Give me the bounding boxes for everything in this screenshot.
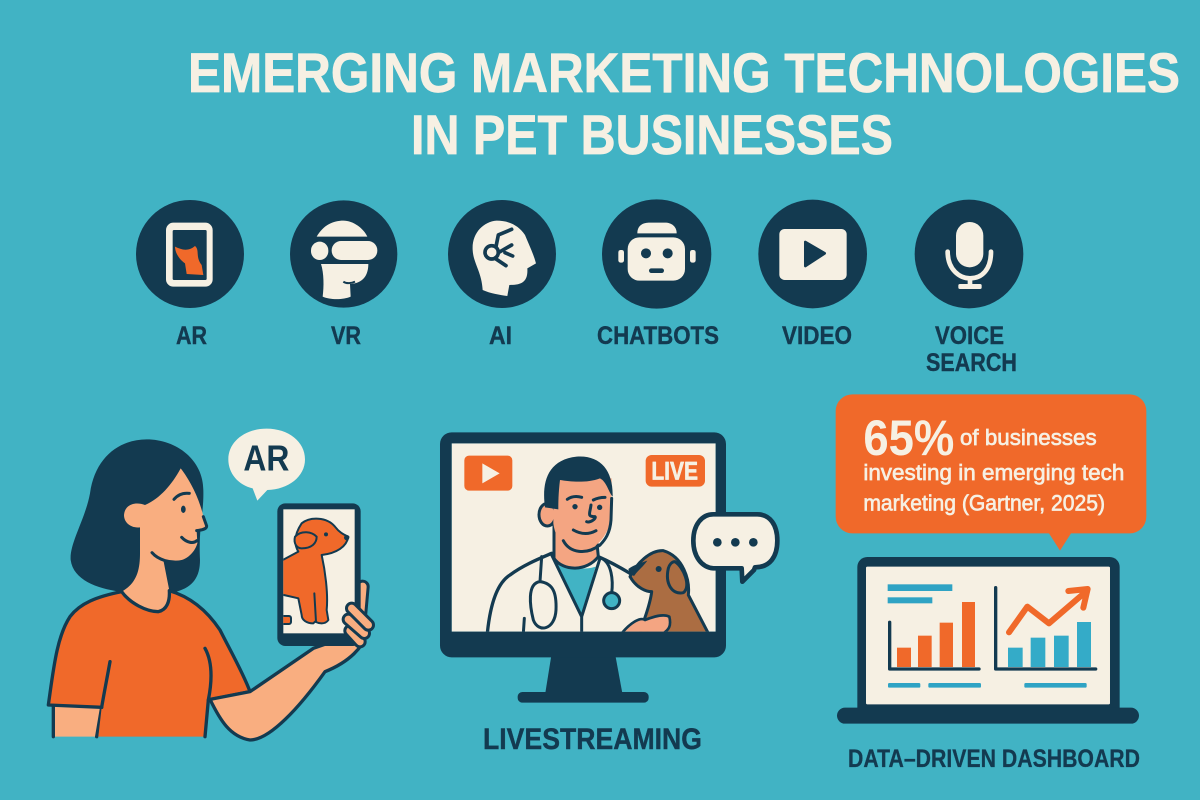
stethoscope chest piece	[604, 593, 620, 609]
woman's face and neck	[122, 468, 207, 612]
callout text: marketing (Gartner, 2025)	[863, 490, 1105, 515]
callout: 65% statistic	[836, 394, 1146, 551]
dog ear	[667, 562, 687, 593]
vet coat	[487, 553, 653, 633]
laptop base	[837, 708, 1139, 724]
phone	[277, 503, 361, 646]
header lines	[888, 584, 952, 603]
illustration: laptop dashboard	[837, 557, 1139, 724]
monitor frame	[440, 432, 726, 657]
AR speech bubble	[228, 429, 305, 501]
dog	[630, 551, 708, 633]
woman's lower arm under sleeve	[53, 707, 102, 737]
chat bubble	[693, 514, 777, 582]
vet face	[553, 478, 612, 553]
icon: AR	[136, 200, 244, 308]
icon labels: VR	[331, 322, 361, 350]
fingers	[348, 608, 368, 642]
vet hand	[622, 615, 670, 633]
LIVE badge: LIVE	[651, 458, 698, 486]
woman's arm and palm	[210, 633, 367, 740]
icon labels	[176, 322, 1017, 377]
monitor base	[518, 692, 649, 703]
icon labels: CHATBOTS	[597, 322, 719, 350]
illustration: woman using AR on phone	[48, 429, 368, 740]
illustration: livestreaming monitor	[440, 432, 777, 703]
AR dog on phone	[277, 519, 349, 624]
woman's shirt	[48, 591, 250, 737]
icon labels: VIDEO	[782, 322, 852, 350]
orange bar chart	[890, 602, 979, 669]
icon: video	[758, 200, 867, 308]
play badge	[464, 456, 512, 491]
callout bubble	[836, 394, 1146, 551]
callout text	[863, 425, 1124, 515]
phone screen	[283, 509, 355, 633]
laptop body	[857, 557, 1120, 712]
vet neck	[554, 520, 598, 568]
laptop screen	[866, 567, 1110, 704]
icon: voice search	[915, 200, 1023, 308]
icon labels: AI	[489, 322, 512, 350]
veterinarian and dog	[487, 457, 708, 633]
vet facial features and coat lines	[523, 497, 612, 633]
icon: AI	[448, 200, 556, 308]
callout text: of businesses	[960, 425, 1097, 450]
vet ear	[539, 503, 556, 526]
monitor stand	[545, 653, 623, 695]
shirt sleeve creases	[102, 648, 211, 707]
dog nose	[628, 561, 647, 576]
label: data-driven dashboard: DATA–DRIVEN DASHBOARD	[848, 745, 1140, 773]
icon labels: VOICE	[935, 322, 1004, 350]
label: livestreaming: LIVESTREAMING	[483, 723, 702, 756]
technology icon row	[136, 199, 1023, 309]
woman's hair	[71, 439, 203, 592]
vet shirt	[558, 564, 596, 612]
icon labels: AR	[176, 322, 207, 350]
blue bar chart with trend arrow	[996, 588, 1096, 669]
AR bubble text: AR	[243, 438, 289, 479]
monitor screen	[452, 443, 716, 632]
woman's facial features	[122, 493, 207, 612]
callout text: investing in emerging tech	[863, 460, 1124, 485]
icon labels: SEARCH	[926, 349, 1017, 377]
thumb behind phone	[360, 587, 363, 617]
vet hair	[544, 457, 613, 509]
icon: VR	[290, 200, 397, 308]
title: IN PET BUSINESSES	[411, 103, 893, 166]
footer lines	[888, 683, 1087, 688]
icon: chatbots	[602, 199, 711, 309]
65 percent figure: 65%	[863, 410, 954, 466]
title	[188, 41, 1180, 166]
